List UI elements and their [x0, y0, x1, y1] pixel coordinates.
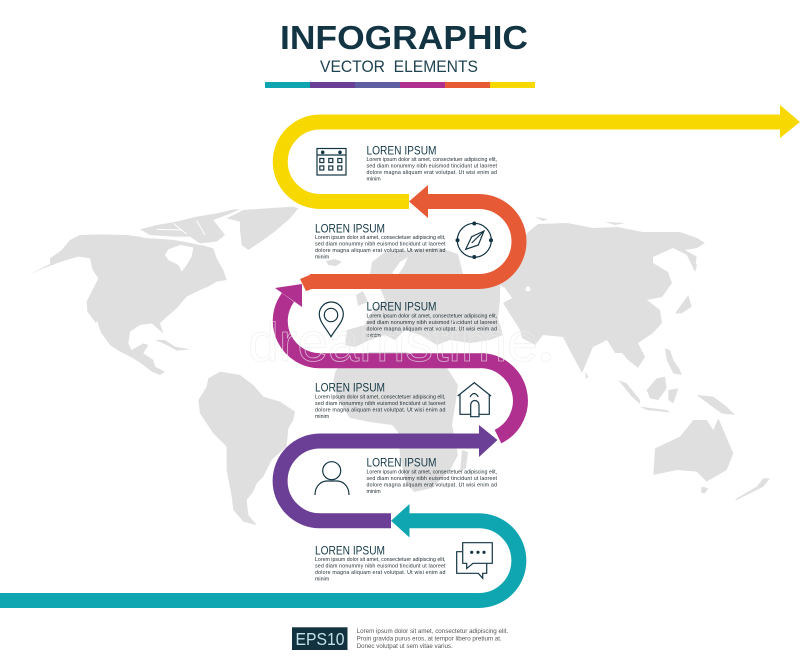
icon: person: [315, 462, 349, 495]
step 6 text: LOREN IPSUM: [315, 544, 385, 557]
step 1 text: sed diam nonummy nibh euismod tincidunt ut laoreet: [366, 163, 498, 169]
orange ribbon arrow: [300, 185, 519, 291]
step 5 text: [366, 457, 498, 495]
step 4 text: [315, 382, 446, 420]
icon: location pin: [319, 302, 343, 337]
subtitle: VECTOR ELEMENTS: [320, 58, 478, 76]
step 6 text: Lorem ipsum dolor sit amet, consectetuer adipiscing elit,: [315, 557, 446, 563]
EPS10 badge: EPS10: [296, 629, 345, 649]
step 4 text: minim: [315, 414, 330, 420]
title colour bar: [265, 82, 535, 88]
step 5 text: sed diam nonummy nibh euismod tincidunt ut laoreet: [366, 476, 498, 482]
step 1 text: minim: [366, 176, 381, 182]
step 2 text: dolore magna aliquam erat volutpat. Ut wisi enim ad: [315, 248, 446, 254]
purple ribbon arrow: [280, 425, 498, 521]
step 3 text: sed diam nonummy nibh euismod tincidunt ut laoreet: [366, 320, 498, 326]
icon: house: [458, 383, 491, 417]
step 5 text: Lorem ipsum dolor sit amet, consectetuer adipiscing elit,: [366, 469, 497, 475]
step 6 text: sed diam nonummy nibh euismod tincidunt ut laoreet: [315, 563, 446, 569]
magenta ribbon arrow: [275, 284, 520, 437]
step 6 text: minim: [315, 576, 330, 582]
oceania and asian islands: [585, 250, 770, 500]
world map: [28, 207, 770, 525]
icon: compass: [456, 222, 492, 258]
step 3 text: LOREN IPSUM: [366, 301, 436, 314]
step 1 text: LOREN IPSUM: [366, 144, 436, 157]
step 5 text: minim: [366, 489, 381, 495]
step 3 text: dolore magna aliquam erat volutpat. Ut wisi enim ad: [366, 326, 497, 332]
icon: chat bubbles: [457, 543, 492, 578]
north america: [28, 209, 240, 375]
step 1 text: dolore magna aliquam erat volutpat. Ut wisi enim ad: [366, 170, 497, 176]
icon: calendar: [317, 148, 346, 175]
step 2 text: LOREN IPSUM: [315, 222, 385, 235]
europe: [326, 248, 503, 347]
step 2 text: minim: [315, 254, 330, 260]
footer text: Lorem ipsum dolor sit amet, consectetur adipiscing elit.: [357, 628, 508, 635]
title: INFOGRAPHIC: [280, 19, 528, 56]
footer text: Donec volutpat ut sem vitae varius.: [357, 643, 453, 650]
greenland: [227, 207, 298, 250]
step 6 text: dolore magna aliquam erat volutpat. Ut wisi enim ad: [315, 570, 446, 576]
step 2 text: sed diam nonummy nibh euismod tincidunt ut laoreet: [315, 241, 446, 247]
step 4 text: sed diam nonummy nibh euismod tincidunt ut laoreet: [315, 401, 446, 407]
step 3 text: Lorem ipsum dolor sit amet, consectetuer adipiscing elit,: [366, 313, 497, 319]
step 2 text: [315, 222, 446, 260]
teal ribbon arrow: [0, 504, 519, 600]
watermark: dreamstime: [248, 311, 538, 373]
footer text: Proin gravida purus eros, at tempor libero pretium at.: [357, 636, 502, 642]
step 1 text: [366, 144, 498, 182]
yellow ribbon arrow: [280, 105, 800, 202]
step 4 text: dolore magna aliquam erat volutpat. Ut wisi enim ad: [315, 407, 446, 413]
south america: [198, 372, 295, 525]
step 6 text: [315, 544, 446, 582]
step 3 text: [366, 301, 498, 339]
footer text: [357, 628, 508, 650]
step 2 text: Lorem ipsum dolor sit amet, consectetuer adipiscing elit,: [315, 235, 446, 241]
step 5 text: LOREN IPSUM: [366, 457, 436, 470]
asia: [500, 217, 705, 373]
step 4 text: LOREN IPSUM: [315, 382, 385, 395]
step 5 text: dolore magna aliquam erat volutpat. Ut wisi enim ad: [366, 482, 497, 488]
step 4 text: Lorem ipsum dolor sit amet, consectetuer adipiscing elit,: [315, 394, 446, 400]
step 3 text: minim: [366, 333, 381, 339]
step 1 text: Lorem ipsum dolor sit amet, consectetuer adipiscing elit,: [366, 157, 497, 163]
africa: [333, 352, 468, 492]
